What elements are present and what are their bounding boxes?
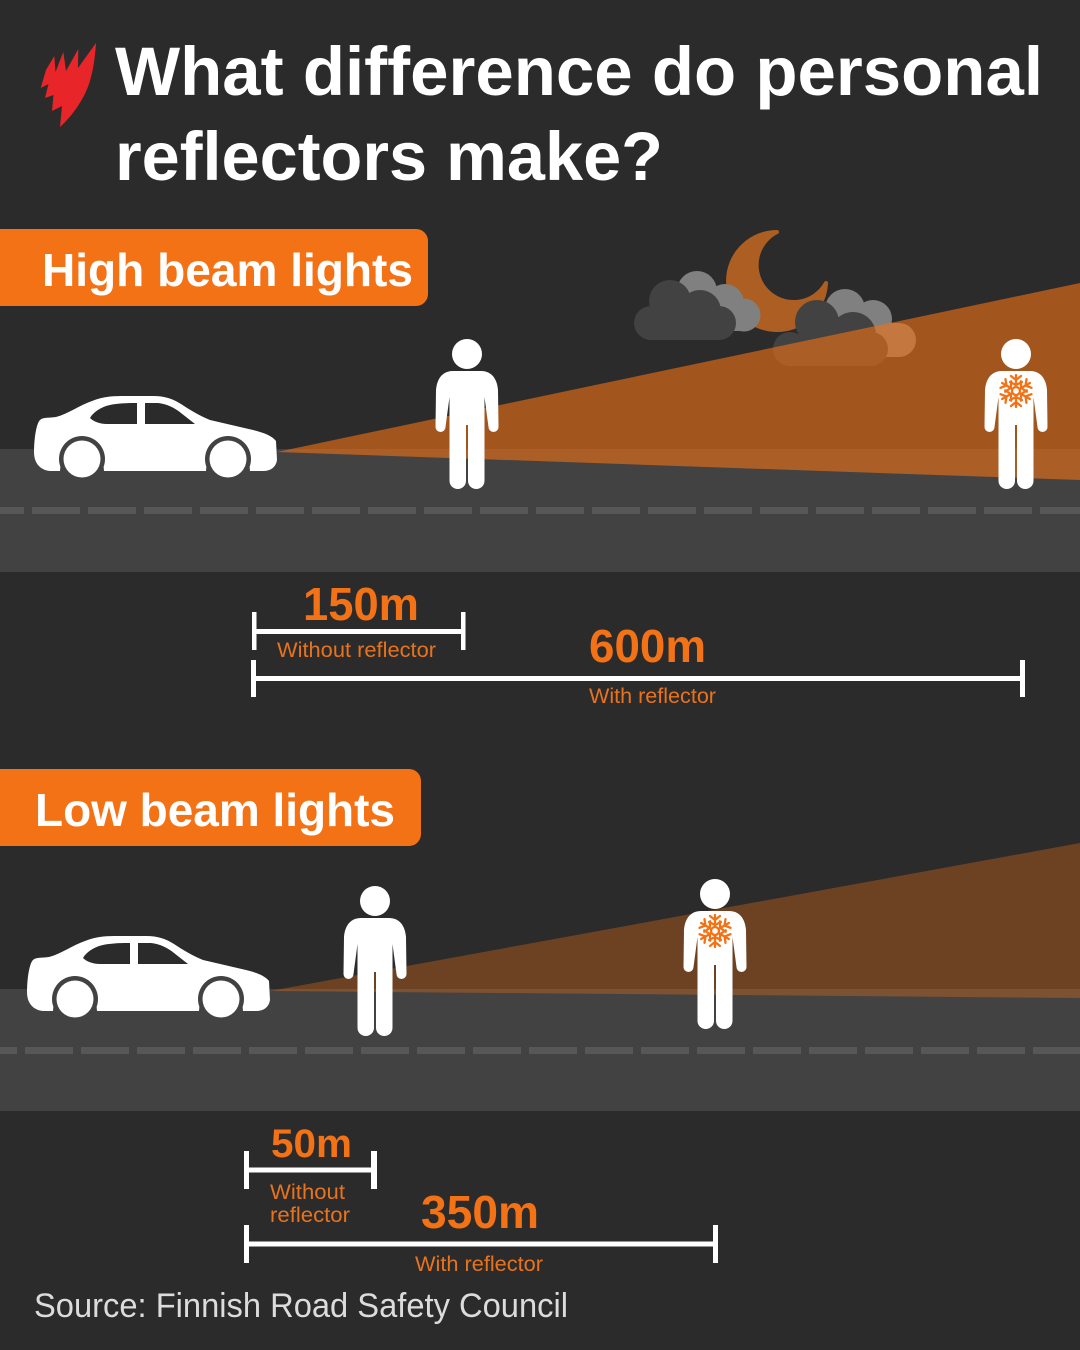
heading: high beam lights: High beam lights <box>42 244 413 296</box>
icon: crescent moon <box>728 232 826 330</box>
icon: left cloud <box>634 271 760 340</box>
source note: Source: Finnish Road Safety Council <box>34 1287 568 1325</box>
title: reflectors make? <box>115 118 663 195</box>
light beam: low beam <box>270 843 1080 998</box>
road: low beam <box>0 989 1080 1111</box>
measure: 150m without reflector: 150m <box>303 578 419 630</box>
light beam: high beam <box>277 283 1080 480</box>
icon: person without reflector <box>344 886 406 1036</box>
measure: 150m without reflector: Without reflector <box>277 639 436 662</box>
measure: 50m without reflector <box>244 1122 377 1227</box>
measure: 50m without reflector: reflector <box>270 1204 350 1227</box>
measure: 150m without reflector <box>252 578 466 662</box>
panel: high beam lights <box>0 229 1080 708</box>
measure: 600m with reflector: With reflector <box>589 685 716 708</box>
title: What difference do personal <box>115 33 1043 110</box>
measure: 50m without reflector: 50m <box>271 1122 352 1166</box>
icon: right cloud <box>773 289 916 366</box>
icon: person with reflector <box>984 339 1048 489</box>
panel: low beam lights <box>0 769 1080 1276</box>
icon: person with reflector <box>684 879 746 1029</box>
heading: high beam lights <box>0 229 428 306</box>
measure: 350m with reflector <box>244 1186 718 1276</box>
icon: car high beam <box>34 396 277 482</box>
measure: 350m with reflector: 350m <box>421 1186 539 1238</box>
icon: car low beam <box>27 936 270 1022</box>
road: high beam <box>0 449 1080 572</box>
heading: low beam lights: Low beam lights <box>35 784 395 836</box>
title <box>115 33 1043 195</box>
measure: 600m with reflector: 600m <box>589 620 706 672</box>
measure: 50m without reflector: Without <box>270 1181 345 1204</box>
icon: person without reflector <box>436 339 498 489</box>
measure: 600m with reflector <box>251 620 1025 708</box>
icon: broadcaster logo <box>41 43 96 127</box>
heading: low beam lights <box>0 769 421 846</box>
measure: 350m with reflector: With reflector <box>415 1253 543 1276</box>
